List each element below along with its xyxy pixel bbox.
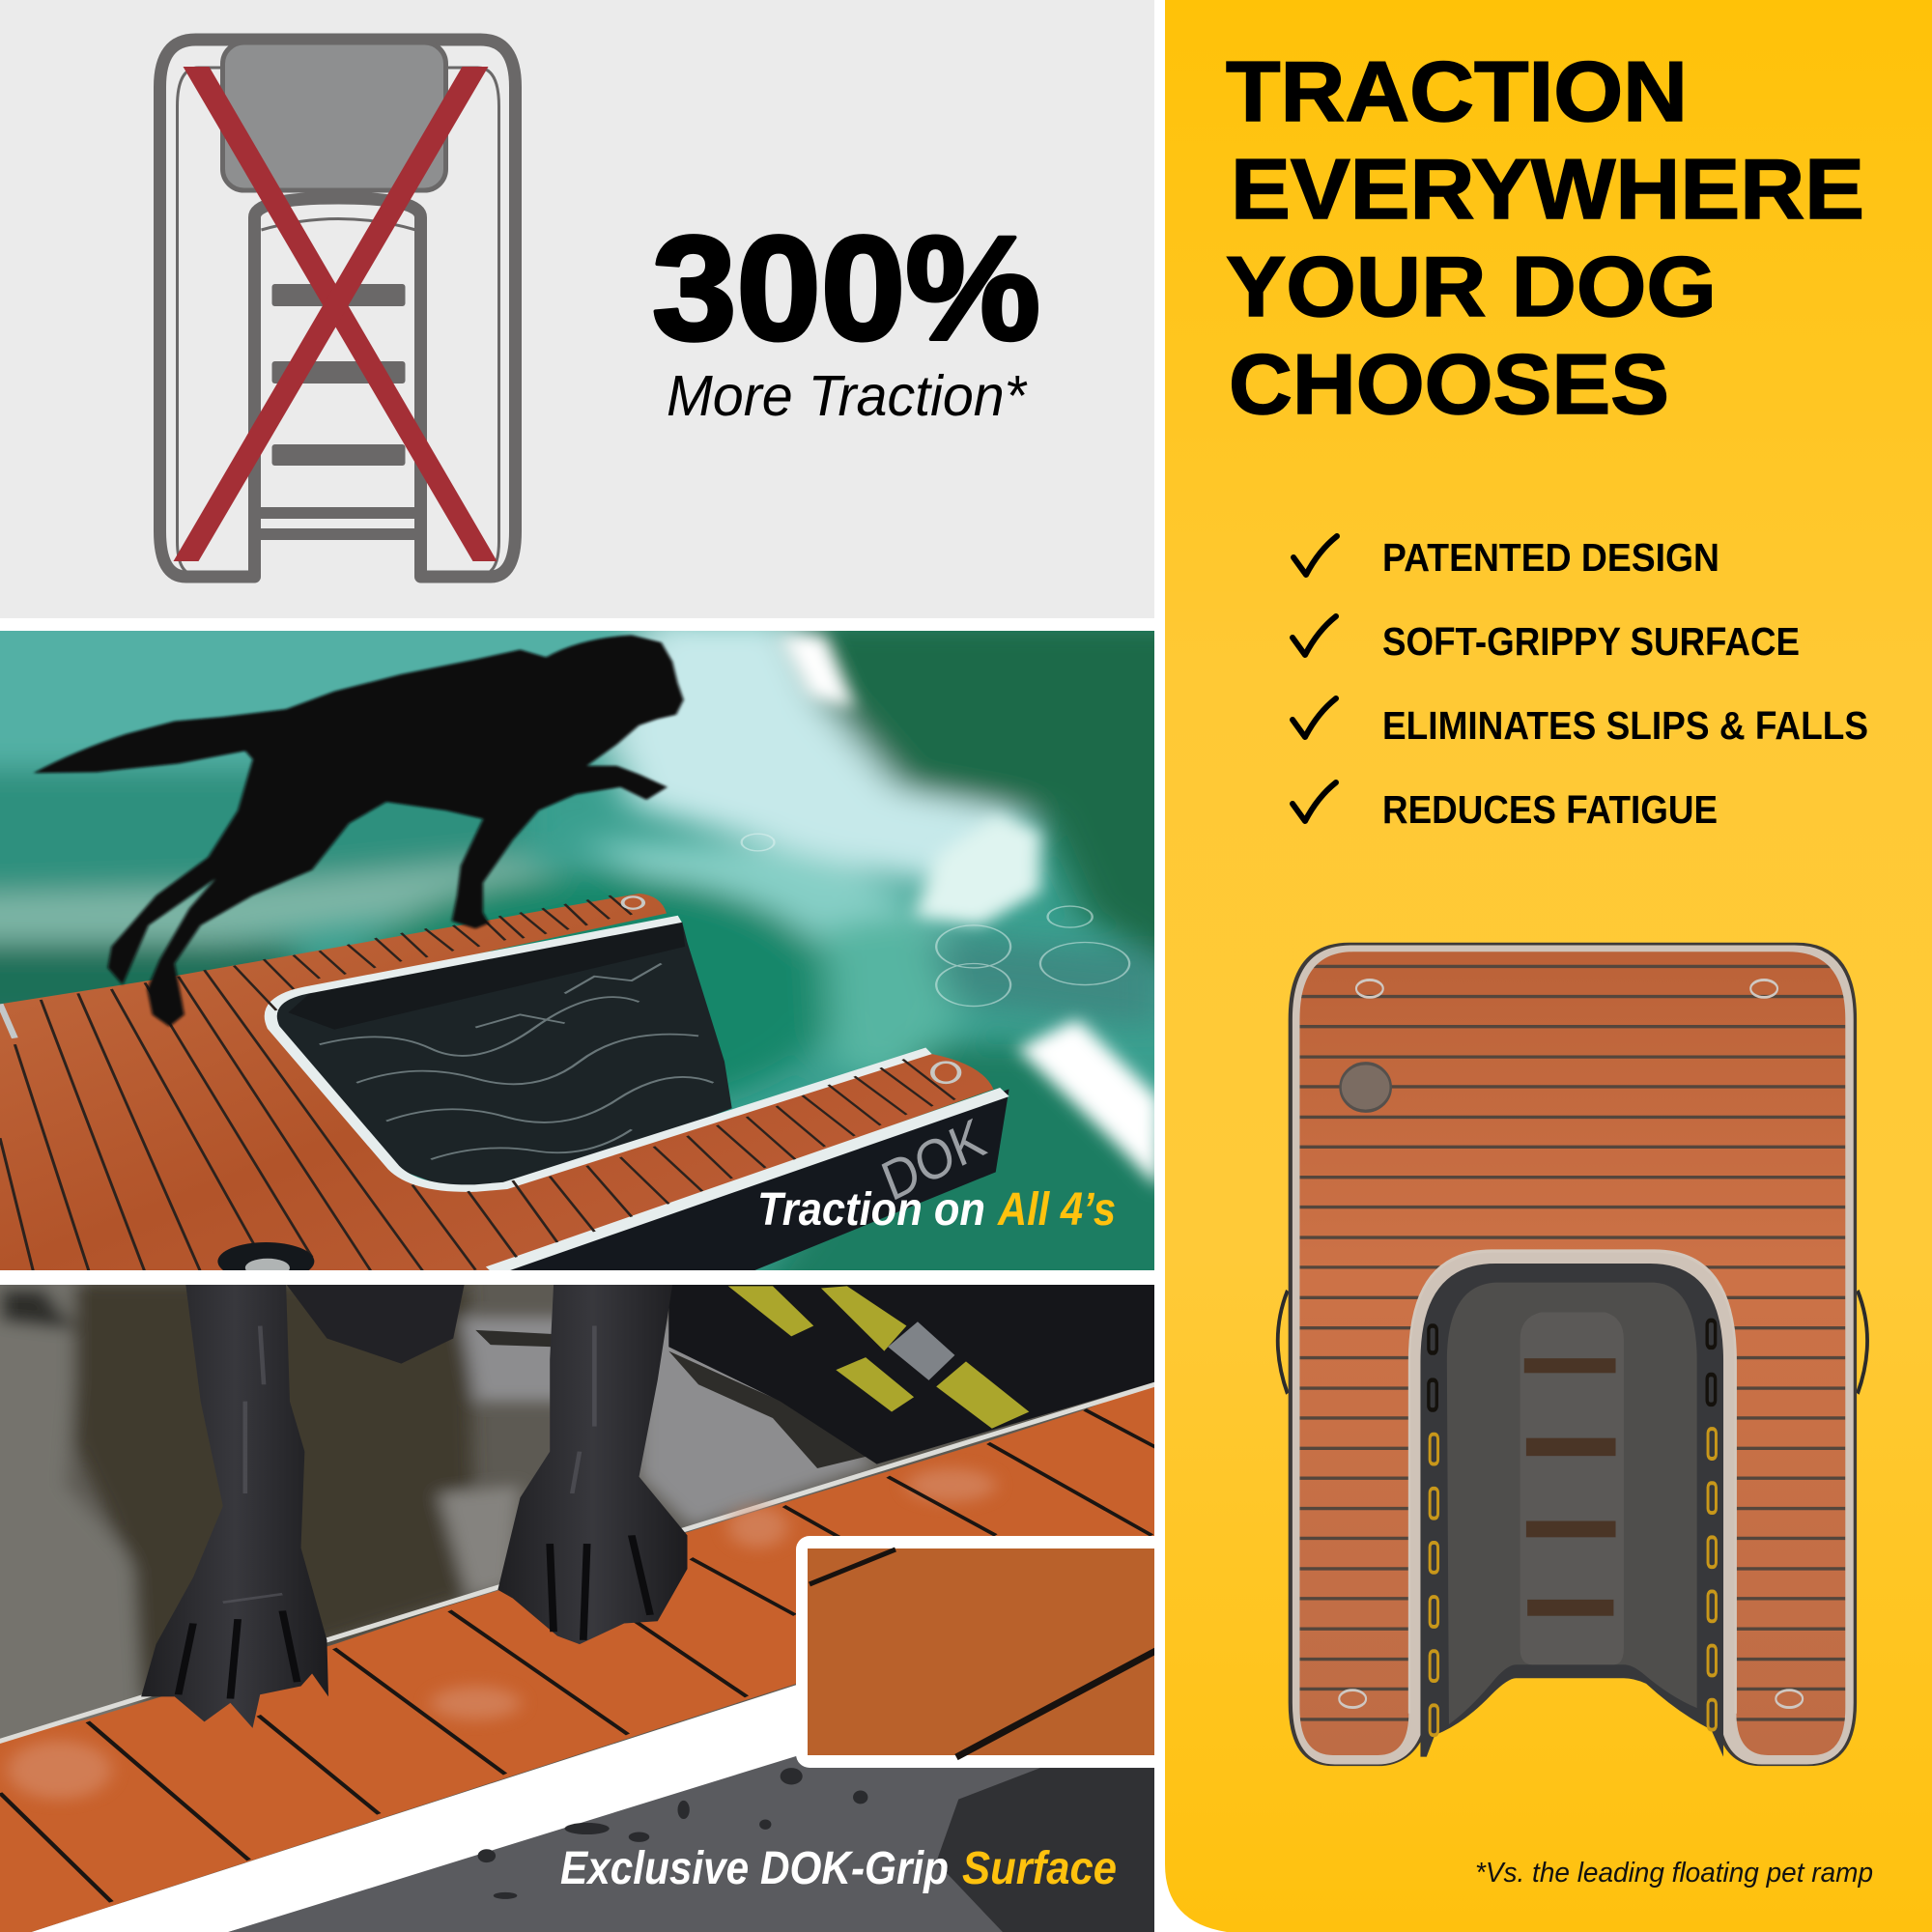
panel: dog on ramp photo <box>0 631 1154 1270</box>
deck orange planks <box>0 1380 1160 1932</box>
hull stripes <box>728 1286 1029 1429</box>
U trim cover <box>1409 1251 1736 1714</box>
footnote: *Vs. the leading floating pet ramp <box>1475 1858 1873 1889</box>
caption: exclusive DOK-grip surface: Exclusive DOK-Grip <box>560 1843 949 1894</box>
D-rings and valve <box>0 896 959 1281</box>
deck front side <box>483 1089 1009 1272</box>
icon: crossed-out competitor ramp <box>160 40 516 577</box>
right paw <box>497 1285 688 1644</box>
plank lines <box>1299 966 1845 1719</box>
water reflections <box>475 1330 869 1468</box>
caption: traction on all 4's <box>760 1191 1115 1225</box>
caption: traction on all 4's: All 4’s <box>997 1184 1116 1236</box>
mat <box>1447 1283 1697 1724</box>
item: reduces fatigue: REDUCES FATIGUE <box>1382 787 1718 832</box>
ramp inner wall <box>288 922 685 1030</box>
item: patented design: PATENTED DESIGN <box>1382 535 1719 580</box>
illustration: inflatable ramp top view <box>1278 943 1867 1766</box>
left paw <box>141 1285 328 1728</box>
heading: EVERYWHERE <box>1231 141 1864 237</box>
stat: 300%: 300% <box>652 206 1040 371</box>
deck plank grooves <box>0 895 954 1272</box>
loops <box>1429 1321 1716 1409</box>
panel: paws on deck photo <box>0 1275 1189 1932</box>
caption: exclusive DOK-grip surface: Surface <box>962 1843 1117 1894</box>
panel: 300% more traction <box>0 0 1154 618</box>
DOK logo on side: DOK <box>874 1106 993 1213</box>
heading: YOUR DOG <box>1226 239 1717 334</box>
deck wear patches <box>8 1468 996 1800</box>
heading: TRACTION <box>1226 43 1688 139</box>
dark frame <box>1420 1264 1723 1757</box>
outer body <box>1289 943 1857 1766</box>
item: eliminates slips and falls: ELIMINATES SLIPS & FALLS <box>1382 703 1868 748</box>
deck grooves <box>0 1409 1160 1902</box>
panel: yellow sidebar <box>1165 0 1932 1932</box>
heading: CHOOSES <box>1229 336 1669 432</box>
stat label: More Traction* <box>667 364 1028 428</box>
icon: check <box>1293 616 1336 655</box>
white edge and surface <box>0 1684 817 1932</box>
deck surface <box>0 894 993 1272</box>
water droplets <box>478 1768 867 1899</box>
ramp pit <box>275 922 732 1189</box>
icon: check <box>1293 536 1337 575</box>
caption: traction on all 4's: Traction on <box>757 1184 985 1236</box>
rungs <box>1524 1358 1615 1616</box>
checklist <box>1293 535 1868 832</box>
boat hull <box>668 1285 1154 1464</box>
tube bottom <box>228 1756 1039 1932</box>
icon: check <box>1293 782 1336 821</box>
dog silhouette <box>34 636 684 1027</box>
white trim <box>270 919 928 1188</box>
teak surface <box>1299 952 1845 1755</box>
item: soft-grippy surface: SOFT-GRIPPY SURFACE <box>1382 619 1800 664</box>
photo scene: water <box>0 631 1154 1270</box>
icon: check <box>1293 698 1336 737</box>
dog body at top <box>286 1284 465 1364</box>
heading <box>1226 43 1864 432</box>
inset: surface close-up <box>796 1536 1182 1768</box>
D-rings <box>1339 980 1803 1708</box>
handles <box>1278 1291 1867 1394</box>
photo scene: paws and deck <box>0 1275 1189 1932</box>
valve <box>1341 1064 1391 1111</box>
